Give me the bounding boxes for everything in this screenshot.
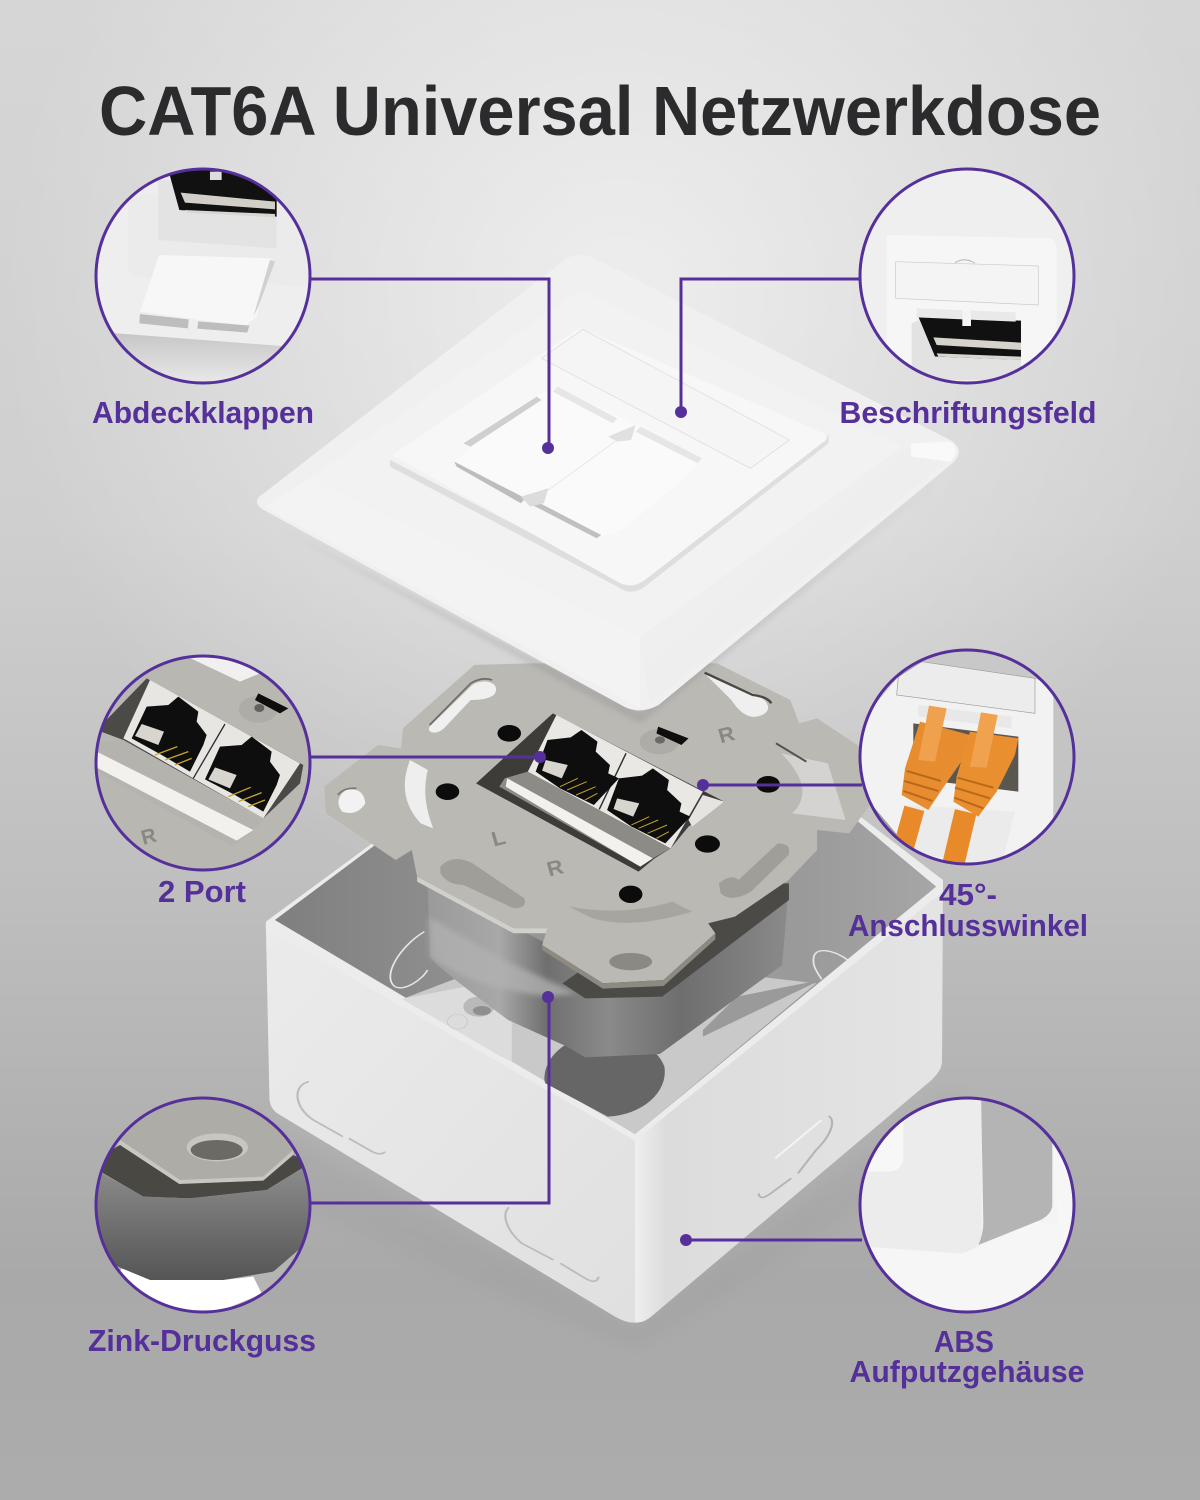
shield clip bbox=[689, 795, 724, 827]
zinc body bbox=[90, 1163, 310, 1280]
background above module bbox=[876, 652, 1039, 702]
inner plate top bbox=[392, 327, 827, 585]
label: 45 degree connection angle: Anschlusswinkel bbox=[848, 908, 1088, 943]
label: Beschriftungsfeld: Beschriftungsfeld bbox=[840, 395, 1096, 430]
knockouts left bbox=[298, 1082, 599, 1281]
box interior bbox=[275, 802, 936, 1134]
stamped letters: R bbox=[544, 855, 567, 881]
module face bbox=[158, 180, 174, 194]
knockouts right bbox=[759, 1116, 832, 1197]
label: 2 Port: 2 Port bbox=[158, 874, 246, 909]
detail circle: 45 degree angle bbox=[858, 648, 1076, 866]
surface-mount housing bbox=[241, 800, 957, 1350]
detail circle: Beschriftungsfeld bbox=[860, 169, 1074, 383]
front face bbox=[855, 1090, 982, 1253]
knockout bbox=[867, 1122, 903, 1172]
adjustment screw bbox=[640, 729, 679, 754]
stamped letters bbox=[489, 722, 738, 881]
cable entry hole bbox=[544, 1034, 665, 1117]
box floor bbox=[404, 950, 816, 1134]
cover outer bbox=[257, 255, 959, 710]
callout line: 45 degree angle bbox=[697, 779, 862, 791]
label: ABS Aufputzgehaeuse bbox=[850, 1324, 1084, 1389]
port opening bbox=[476, 713, 724, 872]
label: ABS Aufputzgehaeuse: ABS bbox=[934, 1324, 994, 1359]
socket top bbox=[918, 705, 1012, 728]
plate outline bbox=[324, 663, 876, 983]
inner plate side bbox=[390, 435, 828, 592]
upper-left keyhole slot bbox=[429, 681, 496, 733]
box left face bbox=[266, 925, 635, 1323]
detail circle: Abdeckklappen bbox=[94, 168, 312, 384]
open socket bbox=[168, 170, 277, 217]
orange cable 1 bbox=[903, 808, 914, 848]
detail circle: ABS housing bbox=[858, 1096, 1076, 1314]
callout line: 2 Port bbox=[310, 751, 546, 763]
port frame bbox=[528, 715, 703, 848]
label: 45 degree connection angle bbox=[848, 877, 1088, 943]
cover peek bbox=[190, 658, 260, 682]
box shadow bbox=[241, 1083, 957, 1350]
stamped letters: R bbox=[716, 722, 738, 748]
side face bbox=[978, 1090, 1052, 1245]
faceplate module bbox=[887, 235, 1057, 380]
left hole and wing opening bbox=[338, 789, 365, 813]
flap bbox=[140, 255, 272, 325]
label: ABS Aufputzgehaeuse: Aufputzgehäuse bbox=[850, 1354, 1084, 1389]
white floor bbox=[120, 1268, 262, 1310]
socket bbox=[918, 317, 1021, 360]
dark recess bbox=[97, 678, 303, 818]
dark band under plate bbox=[90, 1145, 310, 1198]
jack 2 bbox=[205, 737, 280, 812]
metal mounting plate bbox=[324, 663, 876, 989]
stamped R: R bbox=[139, 824, 159, 850]
cover bevels bbox=[264, 478, 640, 708]
box right face bbox=[635, 890, 943, 1323]
detail circle: 2 Port bbox=[93, 653, 310, 870]
jack right bbox=[607, 768, 690, 843]
flap below plugs bbox=[898, 805, 1015, 865]
hinged flaps bbox=[454, 387, 702, 537]
labelling field bbox=[542, 329, 789, 468]
orange plug 1 bbox=[902, 706, 970, 810]
label window bbox=[897, 662, 1035, 713]
detail circle: Zink-Druckguss bbox=[94, 1096, 312, 1314]
zinc die-cast body bbox=[428, 883, 789, 1057]
plate backdrop bbox=[128, 193, 310, 287]
upper-right keyhole slot bbox=[705, 673, 768, 717]
table edge bbox=[114, 333, 282, 380]
callout line: Zink-Druckguss bbox=[310, 991, 554, 1203]
orange cable 2 bbox=[952, 812, 966, 868]
jack left bbox=[536, 730, 619, 805]
port frame bbox=[123, 680, 300, 818]
screw holes bbox=[436, 725, 780, 903]
label: Abdeckklappen: Abdeckklappen bbox=[92, 395, 314, 430]
title: CAT6A Universal Netzwerkdose bbox=[99, 72, 1101, 150]
callout line: Abdeckklappen bbox=[310, 279, 554, 454]
lower bar bbox=[124, 740, 132, 745]
lower keyhole slots bbox=[440, 859, 525, 908]
orange plug 2 bbox=[953, 712, 1018, 817]
wall plate cover bbox=[257, 255, 959, 723]
callout line: ABS bbox=[680, 1234, 862, 1246]
plate top bbox=[120, 1100, 293, 1180]
label: 45 degree connection angle: 45°- bbox=[939, 877, 997, 912]
stamped letters: L bbox=[489, 826, 508, 851]
screw tab bbox=[402, 984, 512, 1062]
jack 1 bbox=[132, 697, 207, 772]
label window bbox=[896, 262, 1038, 305]
side of module bbox=[1053, 696, 1072, 818]
mounting wires bbox=[390, 932, 848, 988]
white table bbox=[965, 1222, 1037, 1253]
oval hole bbox=[187, 1133, 248, 1161]
label: Zink-Druckguss: Zink-Druckguss bbox=[88, 1323, 316, 1358]
right arc opening bbox=[781, 753, 846, 820]
box rim bbox=[266, 800, 943, 1141]
screw head bbox=[239, 696, 278, 723]
cover shadow bbox=[278, 480, 939, 723]
callout line: Beschriftungsfeld bbox=[675, 279, 862, 418]
